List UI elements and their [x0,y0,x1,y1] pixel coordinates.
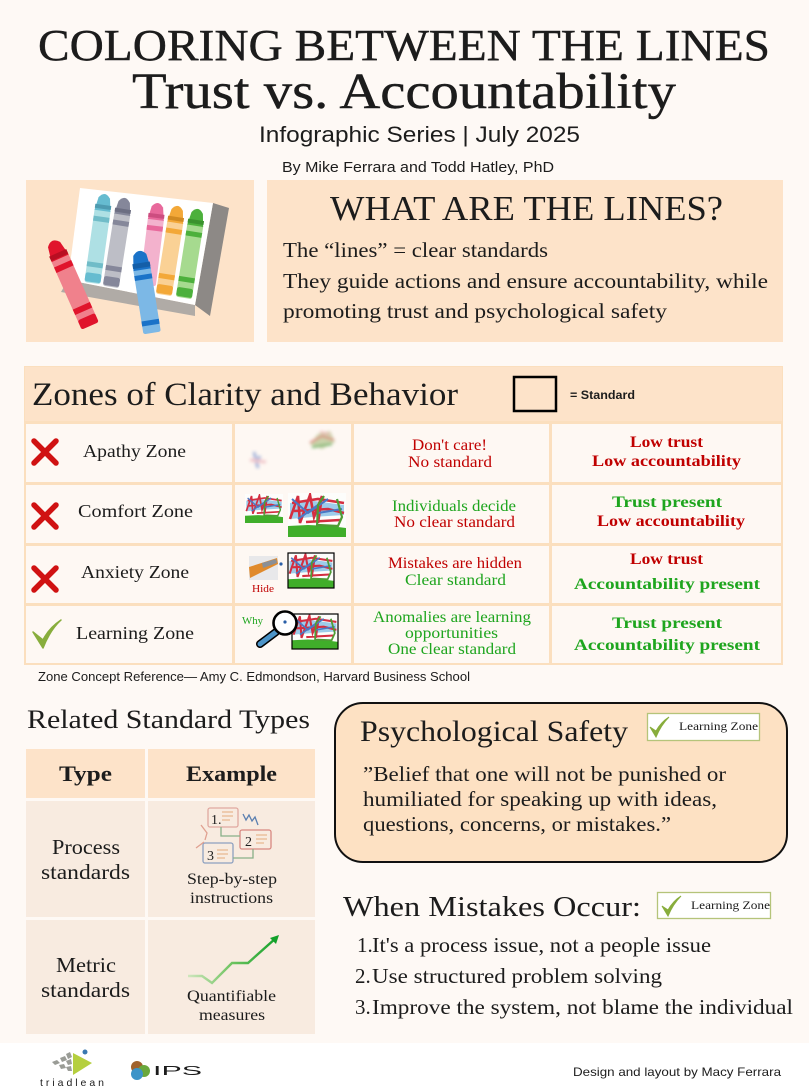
logo: IPS [131,1061,203,1080]
row: apathy zone: No standard [408,454,492,471]
reference note: Zone Concept Reference— Amy C. Edmondson, Harvard Business School [38,670,470,684]
row: apathy zone: Don't care! [412,437,487,454]
badge: learning zone: Learning Zone [679,721,758,733]
caption: quantifiable measures: Quantifiable [187,988,276,1005]
caption: quantifiable measures: measures [199,1007,265,1024]
heading: Psychological Safety [360,715,628,748]
body text: The “lines” = clear standards [283,238,548,262]
body text [283,238,768,323]
row: learning zone: One clear standard [388,641,516,658]
icon: step-by-step flow: 1. [211,813,222,828]
icon: faded scribbles [250,431,335,468]
panel: psychological safety [335,703,787,862]
icon: step-by-step flow: 2 [245,835,252,850]
row: apathy zone: Low accountability [592,453,741,470]
heading: zones: Zones of Clarity and Behavior [32,377,458,413]
panel: zones table [24,366,783,665]
row: comfort zone: Low accountability [597,513,745,530]
numbered list [355,933,793,1019]
caption: step-by-step instructions [187,871,277,907]
numbered list: Use structured problem solving [372,964,663,988]
icon: step-by-step flow: 3 [207,849,214,864]
caption: quantifiable measures [187,988,276,1024]
icon: green check [33,620,61,648]
row: anxiety zone: Low trust [630,551,704,568]
row: comfort zone: No clear standard [394,514,515,531]
quote: ”Belief that one will not be punished or [363,762,726,786]
credit: Design and layout by Macy Ferrara [573,1065,781,1079]
quote [363,762,726,836]
table header: Example [186,761,277,786]
row: anxiety zone: Clear standard [405,572,506,589]
icon: scribbles [245,493,346,537]
series and date: Infographic Series | July 2025 [259,122,580,147]
icon: gray crayon [103,197,133,288]
icon: magnifying glass [242,612,296,644]
icon: green crayon [176,208,206,299]
badge: learning zone [648,714,760,740]
row: apathy zone [34,431,741,471]
row label: process standards [41,835,130,884]
icon: red cross [34,441,56,463]
row: learning zone: Trust present [612,615,723,632]
title [38,21,770,120]
row: learning zone: Learning Zone [76,623,194,643]
caption: step-by-step instructions: Step-by-step [187,871,277,888]
legend: standard box: = Standard [570,390,635,402]
row label: metric standards: Metric [56,953,116,977]
icon: hidden pencil: Hide [252,584,274,595]
title: Trust vs. Accountability [132,64,677,120]
logo: triadlean [40,1050,104,1088]
table header: Type [59,761,112,786]
row: anxiety zone [34,551,761,595]
badge: learning zone: Learning Zone [691,900,770,912]
row: anxiety zone: Accountability present [574,576,761,593]
panel: what are the lines [267,180,783,342]
table header [59,761,277,786]
row: anxiety zone: Mistakes are hidden [388,555,522,572]
row: learning zone [33,609,761,658]
icon: blue crayon [130,250,161,334]
heading: WHAT ARE THE LINES? [330,189,723,228]
panel: standard types table [26,749,315,1034]
body text: promoting trust and psychological safety [283,299,668,323]
body text: They guide actions and ensure accountability, while [283,269,768,293]
row: comfort zone: Individuals decide [392,498,516,515]
logo: IPS: IPS [153,1063,203,1078]
icon: scribble with standard box [292,614,338,649]
icon: red cross [34,568,56,590]
row: learning zone: Accountability present [574,637,761,654]
heading: when mistakes occur: When Mistakes Occur: [343,891,641,923]
icon: rising line chart [188,935,279,983]
icon: orange crayon [156,205,186,296]
icon: step-by-step flow [196,808,271,864]
panel: crayon illustration [26,180,254,342]
row label: process standards: Process [52,835,120,859]
caption: step-by-step instructions: instructions [190,890,273,907]
row label: metric standards [41,953,130,1002]
legend: standard box [514,377,635,411]
numbered list: Improve the system, not blame the individual [372,995,793,1019]
icon: magnifying glass: Why [242,616,264,627]
row label: process standards: standards [41,860,130,884]
icon: teal crayon [84,193,113,284]
icon: red crayon [44,237,99,330]
heading: related standard types: Related Standard Types [27,705,310,734]
icon: red cross [34,505,56,527]
numbered list: 2. [355,964,371,988]
row: apathy zone: Low trust [630,434,704,451]
badge: learning zone [658,892,770,918]
row: comfort zone: Trust present [612,494,723,511]
quote: humiliated for speaking up with ideas, [363,787,717,811]
title: COLORING BETWEEN THE LINES [38,21,770,70]
icon: hidden pencil [249,556,283,595]
numbered list: 3. [355,995,371,1019]
row: comfort zone [34,493,745,537]
icon: pink crayon [140,202,166,286]
icon: scribble with standard box [288,553,334,588]
authors: By Mike Ferrara and Todd Hatley, PhD [282,159,554,176]
numbered list: 1. [357,933,373,957]
icon: crayon box [61,188,229,316]
row: learning zone: opportunities [405,625,498,642]
row: anxiety zone: Anxiety Zone [81,562,189,582]
quote: questions, concerns, or mistakes.” [363,812,671,836]
row: comfort zone: Comfort Zone [78,501,193,521]
row: apathy zone: Apathy Zone [83,441,186,461]
row: learning zone: Anomalies are learning [373,609,531,626]
numbered list: It's a process issue, not a people issue [372,933,711,957]
row label: metric standards: standards [41,978,130,1002]
